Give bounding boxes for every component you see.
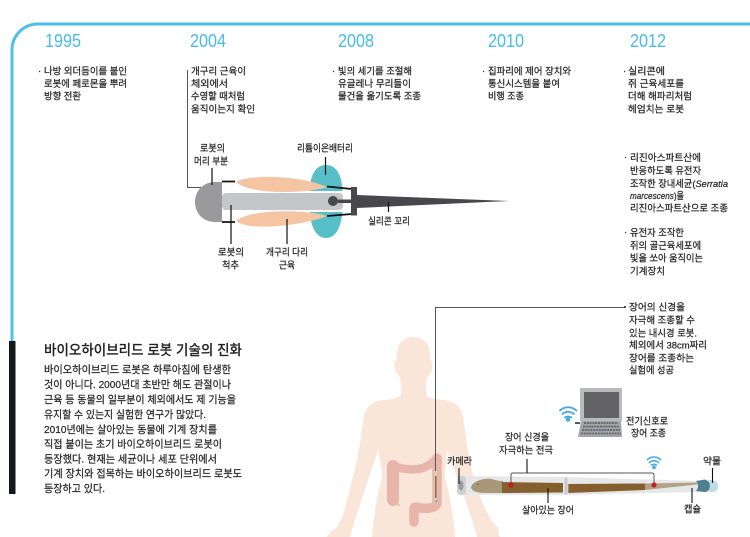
- text: 2012 bacteria robot: 반응하도록 유전자: [630, 165, 701, 177]
- year 2008: 물건을 옮기도록 조종: [338, 92, 421, 102]
- description: endoscope robot: 장어의 신경을: [629, 302, 685, 314]
- icon: wifi near laptop: [560, 407, 577, 422]
- robot labels: 실리콘 꼬리: [368, 216, 410, 228]
- robot labels: [194, 144, 410, 272]
- body text: 것이 아니다. 2000년대 초반만 해도 관절이나: [44, 378, 231, 391]
- icon: laptop: [575, 388, 622, 437]
- year 2010: 2010: [488, 31, 524, 51]
- body text: [44, 363, 242, 495]
- year 2004: 개구리 근육이: [191, 66, 246, 78]
- timeline line: [12, 24, 750, 341]
- text: 2012 bacteria robot: [624, 152, 728, 214]
- joint and tail: [338, 187, 509, 216]
- camera end: [457, 476, 466, 495]
- year 1995: 로봇에 페로몬을 뿌려: [44, 78, 127, 90]
- text: 2012 light-driven device: 쥐의 골근육세포에: [630, 241, 701, 252]
- description: endoscope robot: 실험에 성공: [629, 366, 674, 376]
- description: endoscope robot: 자극해 조종할 수: [629, 314, 695, 326]
- ring: [564, 477, 568, 495]
- capsule labels: 캡슐: [684, 504, 701, 516]
- description: endoscope robot: 있는 내시경 로봇.: [629, 328, 697, 340]
- year 2004: 수영할 때처럼: [191, 90, 245, 102]
- year 1995: 나방 외더듬이를 붙인: [44, 66, 127, 78]
- year 2004: 움직이는지 확인: [191, 104, 255, 116]
- body text: 유지할 수 있는지 실험한 연구가 많았다.: [44, 409, 206, 421]
- miniature robot in colon: [434, 471, 438, 502]
- year 2012: ·: [623, 66, 626, 77]
- leader line: 2004 to robot head: [188, 70, 208, 188]
- body text: 등장하고 있다.: [44, 482, 105, 495]
- robot labels: 리튬이온배터리: [297, 144, 353, 154]
- capsule labels: 약물: [703, 456, 721, 468]
- year 1995: 1995: [45, 31, 81, 51]
- eel body: [502, 482, 563, 493]
- capsule labels: 살아있는 장어: [522, 504, 574, 516]
- text: 2012 light-driven device: [624, 227, 703, 278]
- year 2004: 체외에서: [191, 78, 228, 90]
- year 2012: 쥐 근육세포를: [628, 79, 684, 90]
- text: 2012 bacteria robot: 조작한 장내세균(Serratia: [630, 179, 728, 190]
- icon: wifi on capsule: [647, 457, 661, 469]
- year 2012: 헤엄치는 로봇: [628, 104, 684, 116]
- eel tail: [645, 482, 697, 490]
- year 1995: ·: [38, 66, 41, 77]
- year 2012: 2012: [630, 31, 666, 51]
- text: 2012 light-driven device: 유전자 조작한: [630, 228, 684, 239]
- eel head: [471, 479, 503, 493]
- year 2010: [482, 31, 571, 102]
- label: electric signal: [626, 416, 668, 440]
- capsule labels: [447, 432, 721, 516]
- description: endoscope robot: 체외에서 38cm짜리: [629, 340, 707, 352]
- year 2010: ·: [482, 66, 485, 77]
- robot labels: 로봇의: [218, 248, 244, 258]
- description: endoscope robot: [624, 302, 707, 376]
- year 2010: 비행 조종: [488, 90, 524, 102]
- tendons: [222, 182, 352, 222]
- year 2008: 빛의 세기를 조절해: [338, 66, 412, 78]
- body text: 직접 붙이는 초기 바이오하이브리드 로봇이: [44, 438, 222, 450]
- year 2008: 2008: [338, 31, 374, 51]
- body text: 기계 장치와 접목하는 바이오하이브리드 로봇도: [44, 467, 242, 480]
- year 1995: 방향 전환: [44, 90, 81, 102]
- head: [195, 182, 222, 222]
- leg muscle top: [236, 177, 327, 192]
- label: electric signal: 전기신호로: [626, 416, 668, 428]
- label: electric signal: 장어 조종: [631, 428, 666, 440]
- body text: 근육 등 동물의 일부분이 체외에서도 제 기능을: [44, 393, 236, 406]
- robot labels: 근육: [279, 260, 295, 272]
- year 2008: ·: [332, 66, 335, 77]
- description: endoscope robot: 장어를 조종하는: [629, 352, 694, 364]
- panel: intro text: [44, 342, 242, 495]
- year 2012: 더해 해파리처럼: [628, 90, 692, 102]
- year 2010: 통신시스템을 붙여: [488, 78, 560, 90]
- capsule labels: 카메라: [447, 456, 472, 468]
- year 2012: 실리콘에: [628, 66, 665, 78]
- robot labels: 머리 부분: [194, 156, 228, 168]
- year 2012: [623, 31, 692, 116]
- leg muscle bottom: [236, 211, 327, 227]
- battery: [309, 165, 343, 238]
- capsule labels: 장어 신경을: [505, 432, 549, 444]
- text: 2012 bacteria robot: ·: [624, 152, 627, 163]
- body text: 등장했다. 현재는 세균이나 세포 단위에서: [44, 452, 217, 466]
- electrodes bracket: [509, 473, 656, 487]
- robot labels: 로봇의: [200, 144, 225, 154]
- year 2010: 집파리에 제어 장치와: [488, 66, 571, 78]
- human body silhouette: [327, 337, 500, 537]
- body text: 바이오하이브리드 로봇은 하루아침에 탄생한: [44, 363, 231, 376]
- robot labels: 개구리 다리: [266, 248, 308, 258]
- robot labels: 척추: [222, 260, 239, 272]
- capsule: [696, 480, 710, 492]
- text: 2012 light-driven device: 빛을 쏘아 움직이는: [630, 254, 703, 264]
- capsule labels: 자극하는 전극: [499, 444, 553, 456]
- year 2004: 2004: [190, 31, 226, 51]
- heading: 바이오하이브리드 로봇 기술의 진화: [44, 342, 242, 358]
- body text: 2010년에는 살아있는 동물에 기계 장치를: [44, 424, 217, 436]
- capsule tube with eel: [457, 476, 718, 495]
- year 1995: [38, 31, 127, 102]
- spine: [222, 193, 343, 210]
- colon: [393, 458, 437, 522]
- timeline dark bar: [9, 341, 16, 494]
- text: 2012 bacteria robot: 리진아스파트산으로 조종: [630, 204, 728, 214]
- year 2008: 유글레나 무리들이: [338, 79, 411, 90]
- year 2008: [332, 31, 421, 102]
- robot diagram: frog: [195, 165, 509, 238]
- year 2004: [190, 31, 255, 116]
- text: 2012 bacteria robot: marcescens)을: [630, 191, 684, 202]
- tube: [460, 476, 718, 495]
- text: 2012 light-driven device: ·: [624, 227, 627, 238]
- text: 2012 bacteria robot: 리진아스파트산에: [630, 153, 701, 164]
- text: 2012 light-driven device: 기계장치: [630, 266, 665, 278]
- leader line: endoscope robot to text: [436, 308, 625, 472]
